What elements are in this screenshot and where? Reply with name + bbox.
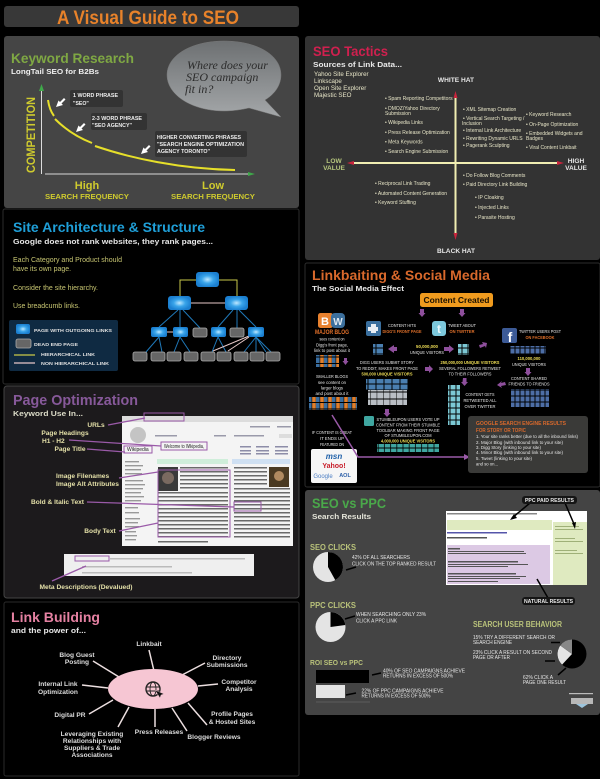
smaller blogs text: SMALLER BLOGS <box>316 374 348 379</box>
heading: site architecture: Site Architecture & Structure <box>13 220 206 235</box>
list: link data sources: Majestic SEO <box>314 92 352 99</box>
speech bubble <box>167 41 281 117</box>
legend <box>9 320 118 371</box>
link building tactics labels: & Hosted Sites <box>209 719 256 726</box>
link building tactics labels: Press Releases <box>135 729 184 736</box>
roi bar chart: 22% OF PPC CAMPAIGNS ACHIEVE <box>362 688 444 694</box>
link building tactics labels: Submissions <box>206 662 248 669</box>
retweet step <box>439 360 501 425</box>
search user behavior section: PAGE ONE RESULT <box>523 680 567 686</box>
digg text: CONTENT HITS <box>388 323 416 328</box>
axis labels <box>323 77 588 255</box>
smaller blogs text: see content on <box>318 380 346 385</box>
major blog text: link to post about it <box>314 348 351 353</box>
search user behavior section: SEARCH ENGINE <box>473 640 512 646</box>
retweet step: TO THEIR FOLLOWERS <box>448 372 492 376</box>
axis labels: VALUE <box>565 165 588 172</box>
text block: advice: Use breadcumb links. <box>13 303 80 310</box>
long tail chart <box>26 84 255 176</box>
smaller blogs text <box>316 374 349 396</box>
ppc clicks section: CLICK A PPC LINK <box>356 618 397 624</box>
link building tactics labels: Blog Guest <box>59 652 95 659</box>
stumbleupon step: STUMBLEUPON USERS VOTE UP <box>376 417 440 422</box>
page optimization labels: H1 - H2 <box>42 438 65 445</box>
retweet step: OVER TWITTER <box>464 404 496 409</box>
retweet step: 250,000,000 UNIQUE VISITORS <box>440 360 500 365</box>
speech bubble: SEO campaign <box>186 70 258 84</box>
callout: 2-3 word phrase: 2-3 WORD PHRASE <box>92 116 143 122</box>
icon: blogger and wordpress <box>318 313 345 328</box>
smaller blogs text: larger blogs <box>321 386 344 390</box>
tactics: black hat low value: • Reciprocal Link Trading <box>375 181 431 187</box>
text block: advice: have its own page. <box>13 266 71 273</box>
major blog text: MAJOR BLOG <box>315 330 349 336</box>
facebook audience: FRIENDS TO FRIENDS <box>508 382 550 386</box>
heading: linkbaiting: Linkbaiting & Social Media <box>312 267 490 283</box>
subheading: keyword use: Keyword Use In... <box>13 409 83 418</box>
icon: twitter <box>432 321 446 336</box>
callout: ppc paid results <box>510 496 577 529</box>
axis labels: HIGH <box>568 158 584 165</box>
roi bar chart: RETURNS IN EXCESS OF 500% <box>383 674 453 680</box>
seo clicks section: SEO CLICKS <box>310 543 357 552</box>
flow arrows <box>342 309 532 417</box>
search user behavior section: PAGE OR AFTER <box>473 655 510 661</box>
link building tactics labels: Profile Pages <box>211 711 253 718</box>
icon: digg <box>366 321 381 336</box>
facebook text: ON FACEBOOK <box>526 335 555 340</box>
callout: higher converting phrases <box>141 131 247 157</box>
search user behavior section: 15% TRY A DIFFERENT SEARCH OR <box>473 635 555 641</box>
portal logos box: AOL <box>339 473 351 479</box>
icon: facebook <box>502 328 517 345</box>
smaller blogs text: and post about it <box>316 391 349 396</box>
link building tactics labels: Directory <box>213 655 242 662</box>
heading: keyword research: Keyword Research <box>11 50 134 66</box>
stumbleupon step: 4,000,000 UNIQUE VISITORS <box>381 438 435 444</box>
facebook audience: UNIQUE VISITORS <box>512 362 546 367</box>
search results screenshot <box>446 511 587 585</box>
page optimization labels: Bold & Italic Text <box>31 499 85 506</box>
tactics: black hat high value: • Paid Directory Link Building <box>463 182 527 188</box>
tactics: white hat low value: • Press Release Optimization <box>385 130 450 136</box>
retweet step: RETWEETED ALL <box>464 398 497 403</box>
stumbleupon step: CONTENT FROM THEIR STUMBLE <box>376 422 440 428</box>
callout: 2-3 word phrase: "SEO AGENCY" <box>92 123 133 129</box>
ppc clicks section: WHEN SEARCHING ONLY 23% <box>356 612 426 618</box>
callout: natural results <box>522 579 575 605</box>
tactics: white hat low value: • DMOZ/Yahoo Directory <box>385 106 440 112</box>
google results box: 5. Tweet (linking to your site) <box>476 456 532 461</box>
purple connector arrow <box>332 415 470 460</box>
page optimization labels: Page Headings <box>41 430 89 437</box>
tactics: white hat mid value: • XML Sitemap Creation <box>463 107 516 113</box>
icon: blogger and wordpress: B <box>321 316 329 328</box>
spokes <box>82 650 218 731</box>
featured portals text: IF CONTENT IS GREAT <box>312 430 352 435</box>
portal logos box: Google <box>313 474 333 480</box>
wikipedia screenshot: Wikipedia <box>127 447 149 453</box>
speech bubble: Where does your <box>187 58 268 72</box>
search user behavior section: 23% CLICK A RESULT ON SECOND <box>473 650 552 656</box>
link building tactics labels: Optimization <box>38 689 78 696</box>
panel: link building <box>4 602 299 776</box>
google results box: and so on... <box>476 462 498 466</box>
axis labels: VALUE <box>323 165 346 172</box>
google results box: FOR STORY OR TOPIC <box>476 428 527 434</box>
twitter text: ON TWITTER <box>450 329 475 334</box>
panel: seo tactics <box>305 36 600 260</box>
portal logos box <box>311 449 357 483</box>
major blog text <box>314 330 351 353</box>
google results box: GOOGLE SEARCH ENGINE RESULTS <box>476 421 566 427</box>
list: link data sources: Linkscape <box>314 78 342 85</box>
tactics: black hat low value <box>375 181 447 206</box>
facebook audience: 110,000,000 <box>518 356 541 361</box>
tactics: white hat low value: • Meta Keywords <box>385 140 423 146</box>
digg text <box>382 323 422 334</box>
google results box <box>468 416 588 473</box>
subheading: power of: and the power of... <box>11 626 86 635</box>
search user behavior section <box>473 620 586 686</box>
tactics: black hat high value: • Do Follow Blog Comments <box>463 173 526 179</box>
digg audience: UNIQUE VISITORS <box>410 350 444 355</box>
callout: higher converting phrases: AGENCY TORONTO" <box>157 149 211 155</box>
tactics: white hat mid value: • Internal Link Architecture <box>463 128 521 134</box>
subheading: link data: Sources of Link Data... <box>313 60 402 69</box>
list: link data sources: Open Site Explorer <box>314 85 366 92</box>
panel: keyword research <box>4 36 299 208</box>
wikipedia screenshot <box>122 413 293 546</box>
tactics: black hat high value: • Injected Links <box>475 205 509 211</box>
featured portals text <box>312 430 352 447</box>
link building tactics labels: Relationships with <box>63 738 121 745</box>
quadrant axes <box>347 91 564 240</box>
retweet step: CONTENT GETS <box>466 392 494 397</box>
twitter text: TWEET ABOUT <box>448 323 476 328</box>
link building tactics labels: Digital PR <box>54 712 86 719</box>
roi bar chart: ROI SEO vs PPC <box>310 660 363 667</box>
axis labels: High <box>75 180 99 192</box>
tactics: white hat mid value: • Vertical Search Targeting / <box>463 116 525 122</box>
twitter text <box>448 323 476 334</box>
panel: linkbaiting and social media <box>305 263 600 487</box>
roi bar chart: 40% OF SEO CAMPAIGNS ACHIEVE <box>383 668 465 674</box>
panel: seo vs ppc <box>305 490 600 715</box>
page optimization labels: Page Title <box>54 446 86 453</box>
central hub with globe icon <box>108 669 198 709</box>
digg audience: 50,000,000 <box>416 344 438 349</box>
reddit step <box>356 360 418 405</box>
reddit step: DIGG USERS SUBMIT STORY <box>360 360 414 365</box>
axis labels: SEARCH FREQUENCY <box>171 192 255 201</box>
link building tactics labels: Competitor <box>221 679 257 686</box>
wikipedia screenshot: Welcome to Wikipedia, <box>164 444 204 450</box>
featured portals text: FEATURED ON <box>320 442 344 447</box>
heading: link building: Link Building <box>11 609 100 625</box>
tactics: white hat low value: Submission <box>385 111 411 117</box>
tactics: white hat high value: • Keyword Research <box>526 112 572 118</box>
search user behavior section: SEARCH USER BEHAVIOR <box>473 620 562 629</box>
site tree diagram <box>133 272 280 361</box>
smaller blogs tiles <box>309 397 357 410</box>
callout: higher converting phrases: "SEARCH ENGINE OPTIMIZATION <box>157 142 244 148</box>
credit logo <box>569 693 593 708</box>
google results box: 2. Major Blog (with inbound link to your site) <box>476 440 563 445</box>
page optimization labels: URLs <box>87 422 105 429</box>
tactics: white hat high value: • Viral Content Linkbait <box>526 145 577 151</box>
heading: seo tactics: SEO Tactics <box>313 43 388 59</box>
text block: advice: Consider the site hierarchy. <box>13 285 98 292</box>
callout: 2-3 word phrase <box>76 113 147 132</box>
meta description screenshot <box>64 554 254 576</box>
reddit step: 500,000 UNIQUE VISITORS <box>362 372 412 376</box>
title bar <box>4 6 299 29</box>
roi bar chart <box>310 660 465 702</box>
stumbleupon step: OF STUMBLEUPON.COM <box>384 433 432 438</box>
google results box: 3. Digg Story (linking to your site) <box>476 445 541 450</box>
legend: HIERARCHICAL LINK <box>41 352 96 358</box>
google results box: 4. Minor Blog (with inbound link to your site) <box>476 450 563 455</box>
digg audience <box>373 344 469 355</box>
page optimization connector lines <box>52 418 234 581</box>
portal logos box: msn <box>326 452 342 461</box>
tactics: black hat high value: • Parasite Hosting <box>475 215 515 221</box>
legend: DEAD END PAGE <box>34 342 79 348</box>
reddit step: TO REDDIT, MAKES FRONT PAGE <box>356 366 418 371</box>
tactics: white hat mid value: Inclusion <box>462 121 482 127</box>
major blog text: Digg's front page, <box>316 342 348 348</box>
callout: 1 word phrase: "SEO" <box>73 101 89 107</box>
page optimization labels: Image Filenames <box>56 473 109 480</box>
roi bar chart: RETURNS IN EXCESS OF 500% <box>362 694 431 700</box>
page optimization labels: Meta Descriptions (Devalued) <box>40 584 132 591</box>
link building tactics labels <box>38 641 257 759</box>
subheading: social media effect: The Social Media Effect <box>312 284 405 293</box>
page optimization labels: Body Text <box>84 528 116 535</box>
featured portals text: IT ENDS UP <box>320 436 344 441</box>
subheading: search results: Search Results <box>312 512 371 521</box>
content created box <box>420 293 493 307</box>
link building tactics labels: Suppliers & Trade <box>64 745 120 752</box>
page optimization labels: Image Alt Attributes <box>56 481 119 488</box>
callout: 1 word phrase <box>56 90 123 107</box>
heading: seo vs ppc: SEO vs PPC <box>312 495 386 511</box>
subheading: google pages: Google does not rank websites, they rank pages... <box>13 237 213 246</box>
speech bubble: fit in? <box>185 82 213 96</box>
link building tactics labels: Associations <box>71 752 113 759</box>
callout: higher converting phrases: HIGHER CONVERTING PHRASES <box>157 135 242 141</box>
seo clicks section <box>310 543 437 582</box>
search user behavior section: 62% CLICK A <box>523 675 553 681</box>
ppc clicks section: PPC CLICKS <box>310 601 357 610</box>
axis labels: WHITE HAT <box>438 77 474 84</box>
portal logos box: Yahoo! <box>322 463 346 470</box>
facebook text <box>519 329 561 340</box>
page optimization labels <box>31 422 132 591</box>
link building tactics labels: Analysis <box>225 686 253 693</box>
callout: natural results: NATURAL RESULTS <box>524 599 573 605</box>
seo clicks section: 42% OF ALL SEARCHERS <box>352 555 410 561</box>
tactics: black hat low value: • Keyword Stuffing <box>375 200 416 206</box>
long tail chart: COMPETITION <box>26 97 38 173</box>
axis labels: LOW <box>326 158 342 165</box>
legend: PAGE WITH OUTGOING LINKS <box>34 328 113 334</box>
seo clicks section: CLICK ON THE TOP RANKED RESULT <box>352 562 437 568</box>
subheading: longtail: LongTail SEO for B2Bs <box>11 67 99 76</box>
facebook audience <box>508 346 550 407</box>
callout: 1 word phrase: 1 WORD PHRASE <box>73 93 119 99</box>
link building tactics labels: Linkbait <box>136 641 162 648</box>
text block: advice: Each Category and Product should <box>13 257 122 264</box>
tactics: white hat mid value: • Pagerank Sculpting <box>463 143 510 149</box>
tactics: white hat low value: • Search Engine Submission <box>385 149 448 155</box>
google results box: 1. Your site ranks better (due to all the inbound links) <box>476 434 578 439</box>
list: link data sources <box>314 71 369 99</box>
tactics: white hat low value: • Wikipedia Links <box>385 120 423 126</box>
tactics: white hat low value <box>385 96 453 155</box>
link building tactics labels: Posting <box>65 659 89 666</box>
callout: ppc paid results: PPC PAID RESULTS <box>525 498 574 504</box>
major blog tiles <box>316 355 339 367</box>
icon: blogger and wordpress: W <box>333 317 343 328</box>
link building tactics labels: Blogger Reviews <box>187 734 241 741</box>
ppc clicks section <box>310 601 426 642</box>
tactics: white hat low value: • Spam Reporting Competitors <box>385 96 453 102</box>
panel: site architecture <box>3 209 299 384</box>
tactics: white hat high value: Badges <box>526 136 543 142</box>
facebook audience: CONTENT SHARED <box>511 376 548 381</box>
tactics: black hat high value: • IP Cloaking <box>475 195 504 201</box>
axis labels: SEARCH FREQUENCY <box>45 192 129 201</box>
legend: NON HIERARCHICAL LINK <box>41 361 110 367</box>
facebook text: TWITTER USERS POST <box>519 329 561 334</box>
link building tactics labels: Internal Link <box>38 681 78 688</box>
tactics: black hat low value: • Automated Content Generation <box>375 191 447 197</box>
stumbleupon step: TOOLBAR MAKING FRONT PAGE <box>376 428 440 433</box>
panel: page optimization <box>4 386 299 598</box>
axis labels <box>45 180 255 201</box>
list: link data sources: Yahoo Site Explorer <box>314 71 369 78</box>
axis labels: Low <box>202 180 224 192</box>
retweet step: SEVERAL FOLLOWERS RETWEET <box>439 366 501 371</box>
tactics: white hat mid value: • Rewriting Dynamic URLS <box>463 136 523 142</box>
icon: facebook: f <box>508 329 513 345</box>
digg text: DIGG'S FRONT PAGE <box>382 329 422 334</box>
heading: page optimization: Page Optimization <box>13 392 138 409</box>
text block: advice <box>13 257 122 310</box>
major blog text: sees content on <box>320 336 345 342</box>
content created box: Content Created <box>424 295 490 305</box>
tactics: white hat mid value <box>462 107 525 149</box>
tactics: white hat high value: • On-Page Optimization <box>526 122 579 128</box>
axis labels: BLACK HAT <box>437 248 475 255</box>
tactics: white hat high value <box>526 112 583 151</box>
title bar: A Visual Guide to SEO <box>57 8 239 29</box>
tactics: black hat high value <box>463 173 527 221</box>
stumbleupon step <box>364 416 440 452</box>
icon: twitter: t <box>437 322 441 336</box>
tactics: white hat high value: • Embedded Widgets and <box>526 131 583 137</box>
link building tactics labels: Leveraging Existing <box>61 731 123 738</box>
